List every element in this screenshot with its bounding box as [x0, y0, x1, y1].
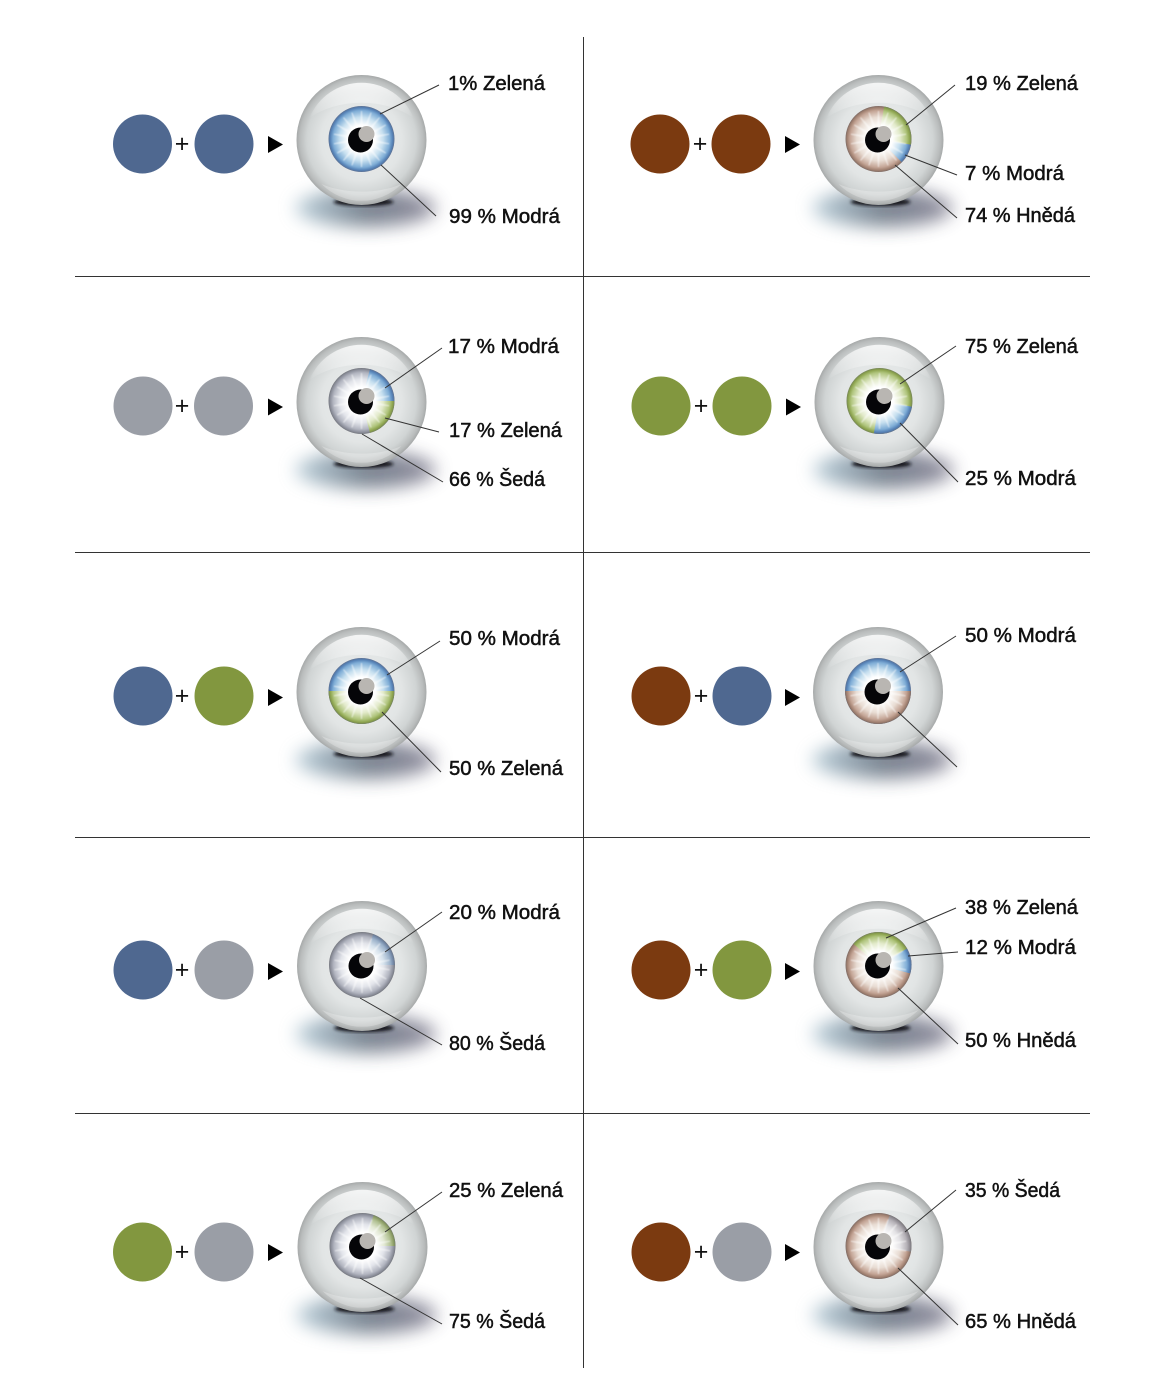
leader lines: [895, 85, 957, 218]
arrow: [785, 1244, 800, 1261]
eye: blue, green: [296, 627, 436, 779]
panel: brown + green: [632, 897, 1079, 1053]
label: 25% blue: 25 % Modrá: [965, 468, 1077, 490]
panel: blue + green: [114, 627, 564, 780]
label: 35% gray: 35 % Šedá: [965, 1179, 1061, 1202]
plus sign: +: [693, 130, 707, 158]
arrow: [785, 963, 800, 980]
label: 80% gray: 80 % Šedá: [449, 1032, 546, 1055]
arrow: [785, 136, 800, 153]
parent colour: green: [113, 1222, 172, 1282]
leader lines: [360, 1192, 442, 1324]
arrow: [268, 136, 283, 153]
label: 17% green: 17 % Zelená: [449, 420, 563, 442]
label: 1% green: 1% Zelená: [448, 73, 546, 95]
parent colour: brown: [632, 666, 690, 726]
leader lines: [362, 348, 443, 482]
eye: brown, gray: [812, 1182, 952, 1334]
eye: blue: [296, 75, 436, 227]
leader lines: [380, 85, 439, 216]
label: 12% blue: 12 % Modrá: [965, 937, 1077, 959]
eye: gray, green: [296, 1182, 436, 1334]
plus sign: +: [694, 682, 708, 710]
leader lines: [886, 908, 958, 1044]
label: 19% green: 19 % Zelená: [965, 73, 1079, 95]
panel: blue + blue: [113, 73, 561, 228]
eye: gray, blue, green: [296, 337, 436, 489]
arrow: [268, 963, 283, 980]
parent colour: blue: [712, 666, 772, 726]
label: 25% green: 25 % Zelená: [449, 1180, 564, 1202]
vertical divider: [582, 37, 584, 1368]
label: 65% brown: 65 % Hnědá: [965, 1311, 1077, 1333]
plus sign: +: [175, 392, 189, 420]
parent colour: blue: [114, 940, 172, 1000]
parent colour: brown: [632, 1222, 690, 1282]
parent colour: gray: [194, 940, 254, 1000]
eye: brown, green, blue: [812, 75, 952, 227]
panel: brown + brown: [630, 73, 1079, 227]
plus sign: +: [694, 392, 708, 420]
label: 75% green: 75 % Zelená: [965, 336, 1079, 358]
panel: blue + gray: [114, 901, 561, 1055]
label: 99% blue: 99 % Modrá: [449, 206, 561, 228]
parent colour: green: [194, 666, 254, 726]
panel: brown + gray: [632, 1179, 1077, 1334]
plus sign: +: [175, 130, 189, 158]
label: 75% gray: 75 % Šedá: [449, 1310, 546, 1333]
parent colour: brown: [630, 114, 690, 174]
horizontal dividers: [75, 276, 1090, 1114]
leader lines: [382, 641, 441, 772]
plus sign: +: [175, 682, 189, 710]
eye: brown, green, blue: [812, 901, 952, 1053]
leader lines: [898, 636, 957, 767]
arrow: [268, 1244, 283, 1261]
label: 50% blue: 50 % Modrá: [965, 625, 1077, 647]
eye: blue, brown: [812, 627, 952, 779]
label: 50% blue: 50 % Modrá: [449, 628, 561, 650]
panel: gray + gray: [114, 336, 563, 491]
label: 74% brown: 74 % Hnědá: [965, 205, 1076, 227]
label: 38% green: 38 % Zelená: [965, 897, 1079, 919]
arrow: [786, 398, 801, 416]
arrow: [785, 689, 800, 706]
leader lines: [900, 346, 958, 482]
plus sign: +: [175, 956, 189, 984]
plus sign: +: [694, 1238, 708, 1266]
label: 17% blue: 17 % Modrá: [448, 336, 560, 358]
panel: green + green: [632, 336, 1079, 490]
parent colour: gray: [712, 1222, 772, 1282]
parent colour: green: [712, 940, 772, 1000]
label: 20% blue: 20 % Modrá: [449, 902, 561, 924]
parent colour: blue: [114, 666, 172, 726]
leader lines: [898, 1190, 958, 1325]
label: 50% brown: 50 % Hnědá: [965, 1030, 1077, 1052]
parent colour: gray: [194, 1222, 254, 1282]
parent colour: green: [632, 376, 690, 436]
panel: brown + blue: [632, 625, 1077, 779]
parent colour: green: [712, 376, 772, 436]
leader lines: [360, 912, 442, 1045]
plus sign: +: [175, 1238, 189, 1266]
parent colour: brown: [712, 114, 770, 174]
arrow: [268, 398, 283, 416]
eye: green, blue: [814, 337, 954, 489]
label: 66% gray: 66 % Šedá: [449, 468, 546, 491]
plus sign: +: [694, 956, 708, 984]
parent colour: brown: [632, 940, 690, 1000]
parent colour: gray: [114, 376, 172, 436]
eye: gray, blue: [296, 901, 436, 1053]
parent colour: blue: [194, 114, 254, 174]
parent colour: blue: [113, 114, 172, 174]
arrow: [268, 689, 283, 706]
panel: green + gray: [113, 1180, 564, 1334]
label: 7% blue: 7 % Modrá: [965, 163, 1065, 185]
parent colour: gray: [194, 376, 253, 436]
label: 50% green: 50 % Zelená: [449, 758, 564, 780]
